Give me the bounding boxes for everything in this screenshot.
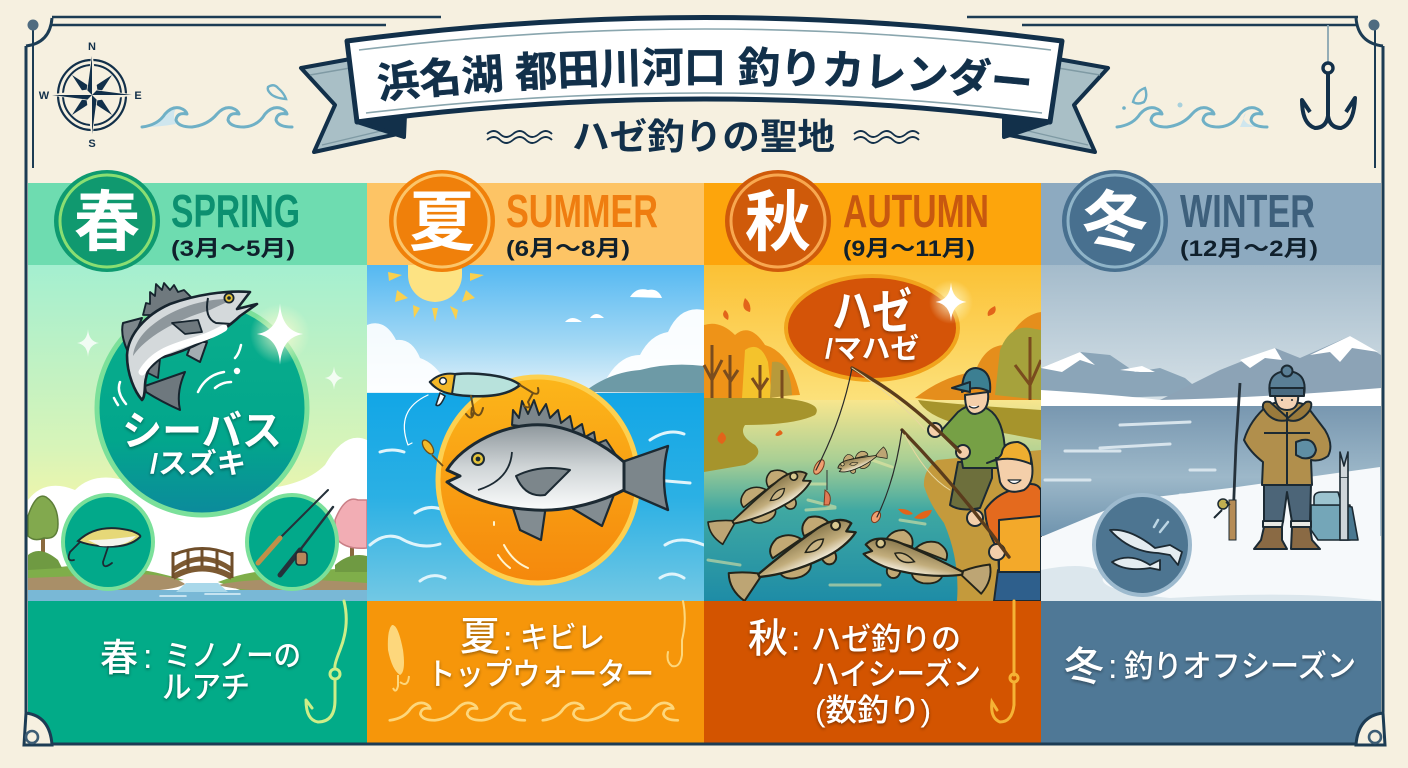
water ripples (708, 460, 925, 585)
summer sky (367, 265, 704, 395)
autumn label: (9月〜11月) (843, 236, 975, 261)
icon: compass rose (39, 41, 142, 150)
summer caption text: : (503, 620, 512, 658)
banner inner rules (359, 29, 1051, 113)
panel: autumn (700, 170, 1041, 744)
subtitle: ハゼ釣りの聖地 (572, 116, 835, 157)
winter header bar (1041, 183, 1381, 265)
icon: jumping sea bass (122, 283, 257, 410)
icon: black sea bream (447, 400, 668, 540)
panel: summer (367, 170, 704, 744)
goby fish group (700, 441, 996, 608)
winter season badge (1062, 170, 1168, 272)
panel: spring (28, 170, 367, 744)
spring caption text: 春 (100, 638, 138, 680)
person in winter clothes (1244, 366, 1330, 549)
autumn caption text: ハイシーズン (811, 657, 981, 692)
spring main species circle (97, 301, 307, 515)
lake reflections (1045, 422, 1215, 495)
caption waves (390, 703, 678, 720)
title ribbon tails (301, 58, 1108, 152)
spring season badge (54, 170, 160, 272)
autumn caption band (704, 601, 1041, 744)
summer caption text (427, 615, 654, 692)
spring header bar (28, 183, 367, 265)
icon: caption hook (306, 601, 346, 722)
angler in orange jacket (967, 442, 1041, 601)
autumn species name: ハゼ (832, 286, 912, 339)
spring season badge: 春 (74, 185, 140, 259)
winter caption text: : (1108, 648, 1117, 686)
autumn caption text: : (791, 620, 800, 658)
summer season badge (389, 170, 495, 272)
title: 浜名湖 都田川河口 釣りカレンダー (378, 46, 1030, 102)
splash (494, 522, 528, 568)
winter label: WINTER (1180, 185, 1315, 237)
summer season badge: 夏 (409, 185, 475, 259)
spring caption text: ルアチ (162, 670, 250, 705)
spring caption text (100, 638, 301, 705)
autumn label: AUTUMN (843, 185, 989, 237)
spring shoreline with trees and bridge (28, 496, 367, 601)
autumn species sub name: /マハゼ (825, 333, 919, 364)
spring species sub name: /スズキ (150, 447, 246, 479)
autumn treeline (704, 312, 1041, 410)
sparkle (929, 280, 973, 324)
summer header bar (367, 183, 704, 265)
icon: lure badge (63, 495, 153, 589)
icon: sun (388, 265, 484, 322)
icon: caption hook (992, 601, 1018, 722)
summer caption text: 夏 (460, 615, 500, 659)
winter caption text (1064, 645, 1356, 689)
left river bank (704, 398, 817, 472)
summer caption text: キビレ (520, 622, 605, 655)
summer caption text: トップウォーター (427, 657, 654, 692)
icon: pale hook (668, 601, 685, 666)
summer label: SUMMER (506, 185, 658, 237)
icon: compass rose: W (39, 90, 50, 102)
clouds (367, 289, 704, 392)
summer label (506, 185, 658, 261)
icon: minnow lure (430, 374, 538, 418)
spring species name: シーバス (122, 408, 282, 454)
panel: winter (1041, 170, 1381, 744)
species title bubble (786, 276, 958, 380)
spring label: (3月〜5月) (171, 236, 295, 261)
icon: hanging hook (1302, 25, 1355, 128)
summer sea (367, 393, 704, 601)
winter season badge: 冬 (1082, 185, 1148, 259)
icon: compass rose: E (134, 90, 142, 102)
angler in green jacket (928, 368, 1005, 509)
tackle box and gear (1311, 452, 1358, 540)
autumn caption text (748, 617, 981, 728)
autumn caption text: (数釣り) (815, 693, 931, 728)
rock bank under anglers (924, 450, 1041, 601)
snow shadow (1041, 566, 1381, 601)
autumn label (843, 185, 989, 261)
summer label: (6月〜8月) (506, 236, 630, 261)
winter sky (1041, 265, 1381, 415)
snowy mountains (1041, 336, 1381, 408)
icon: left waves (142, 85, 292, 127)
winter caption text: 冬 (1064, 645, 1104, 689)
bait and rigs (812, 458, 882, 524)
spring caption text: : (143, 638, 152, 676)
winter label: (12月〜2月) (1180, 236, 1318, 261)
wave highlights (370, 432, 704, 581)
fishing rod on stand (1214, 383, 1240, 540)
icon: small spoon lure on line (404, 395, 443, 466)
splash lines (114, 345, 241, 405)
first fishing rod and line (816, 368, 960, 470)
autumn sky (704, 265, 1041, 435)
spring label (171, 185, 300, 261)
icon: fishing rods badge (247, 490, 337, 589)
snowfield foreground (1041, 467, 1381, 601)
winter fish circle (1094, 495, 1190, 595)
winter caption band (1041, 601, 1381, 744)
second fishing rod and line (877, 430, 1009, 557)
autumn header bar (704, 183, 1041, 265)
right river bank (918, 400, 1041, 440)
icon: right waves (1117, 88, 1267, 127)
autumn season badge: 秋 (745, 185, 811, 259)
icon: compass rose: N (88, 41, 96, 53)
autumn caption text: 秋 (748, 617, 788, 661)
subtitle wave marks (487, 131, 919, 143)
spring caption text: ミノノーの (164, 640, 301, 673)
winter label (1180, 185, 1318, 261)
frozen lake (1041, 406, 1381, 536)
title banner (347, 18, 1062, 122)
autumn season badge (725, 170, 831, 272)
autumn water (704, 400, 1041, 601)
spring label: SPRING (171, 185, 300, 237)
splash drop (234, 368, 240, 374)
sparkle decorations (77, 303, 343, 390)
summer main circle (438, 377, 638, 583)
falling leaves (718, 298, 996, 519)
distant hills (584, 365, 704, 393)
spring caption band (28, 601, 367, 744)
spring scene background (28, 265, 367, 601)
winter caption text: 釣りオフシーズン (1124, 649, 1356, 684)
icon: compass rose: S (88, 138, 96, 150)
icon: pale spoon lure (388, 625, 409, 691)
summer caption band (367, 601, 704, 744)
autumn caption text: ハゼ釣りの (811, 622, 961, 657)
